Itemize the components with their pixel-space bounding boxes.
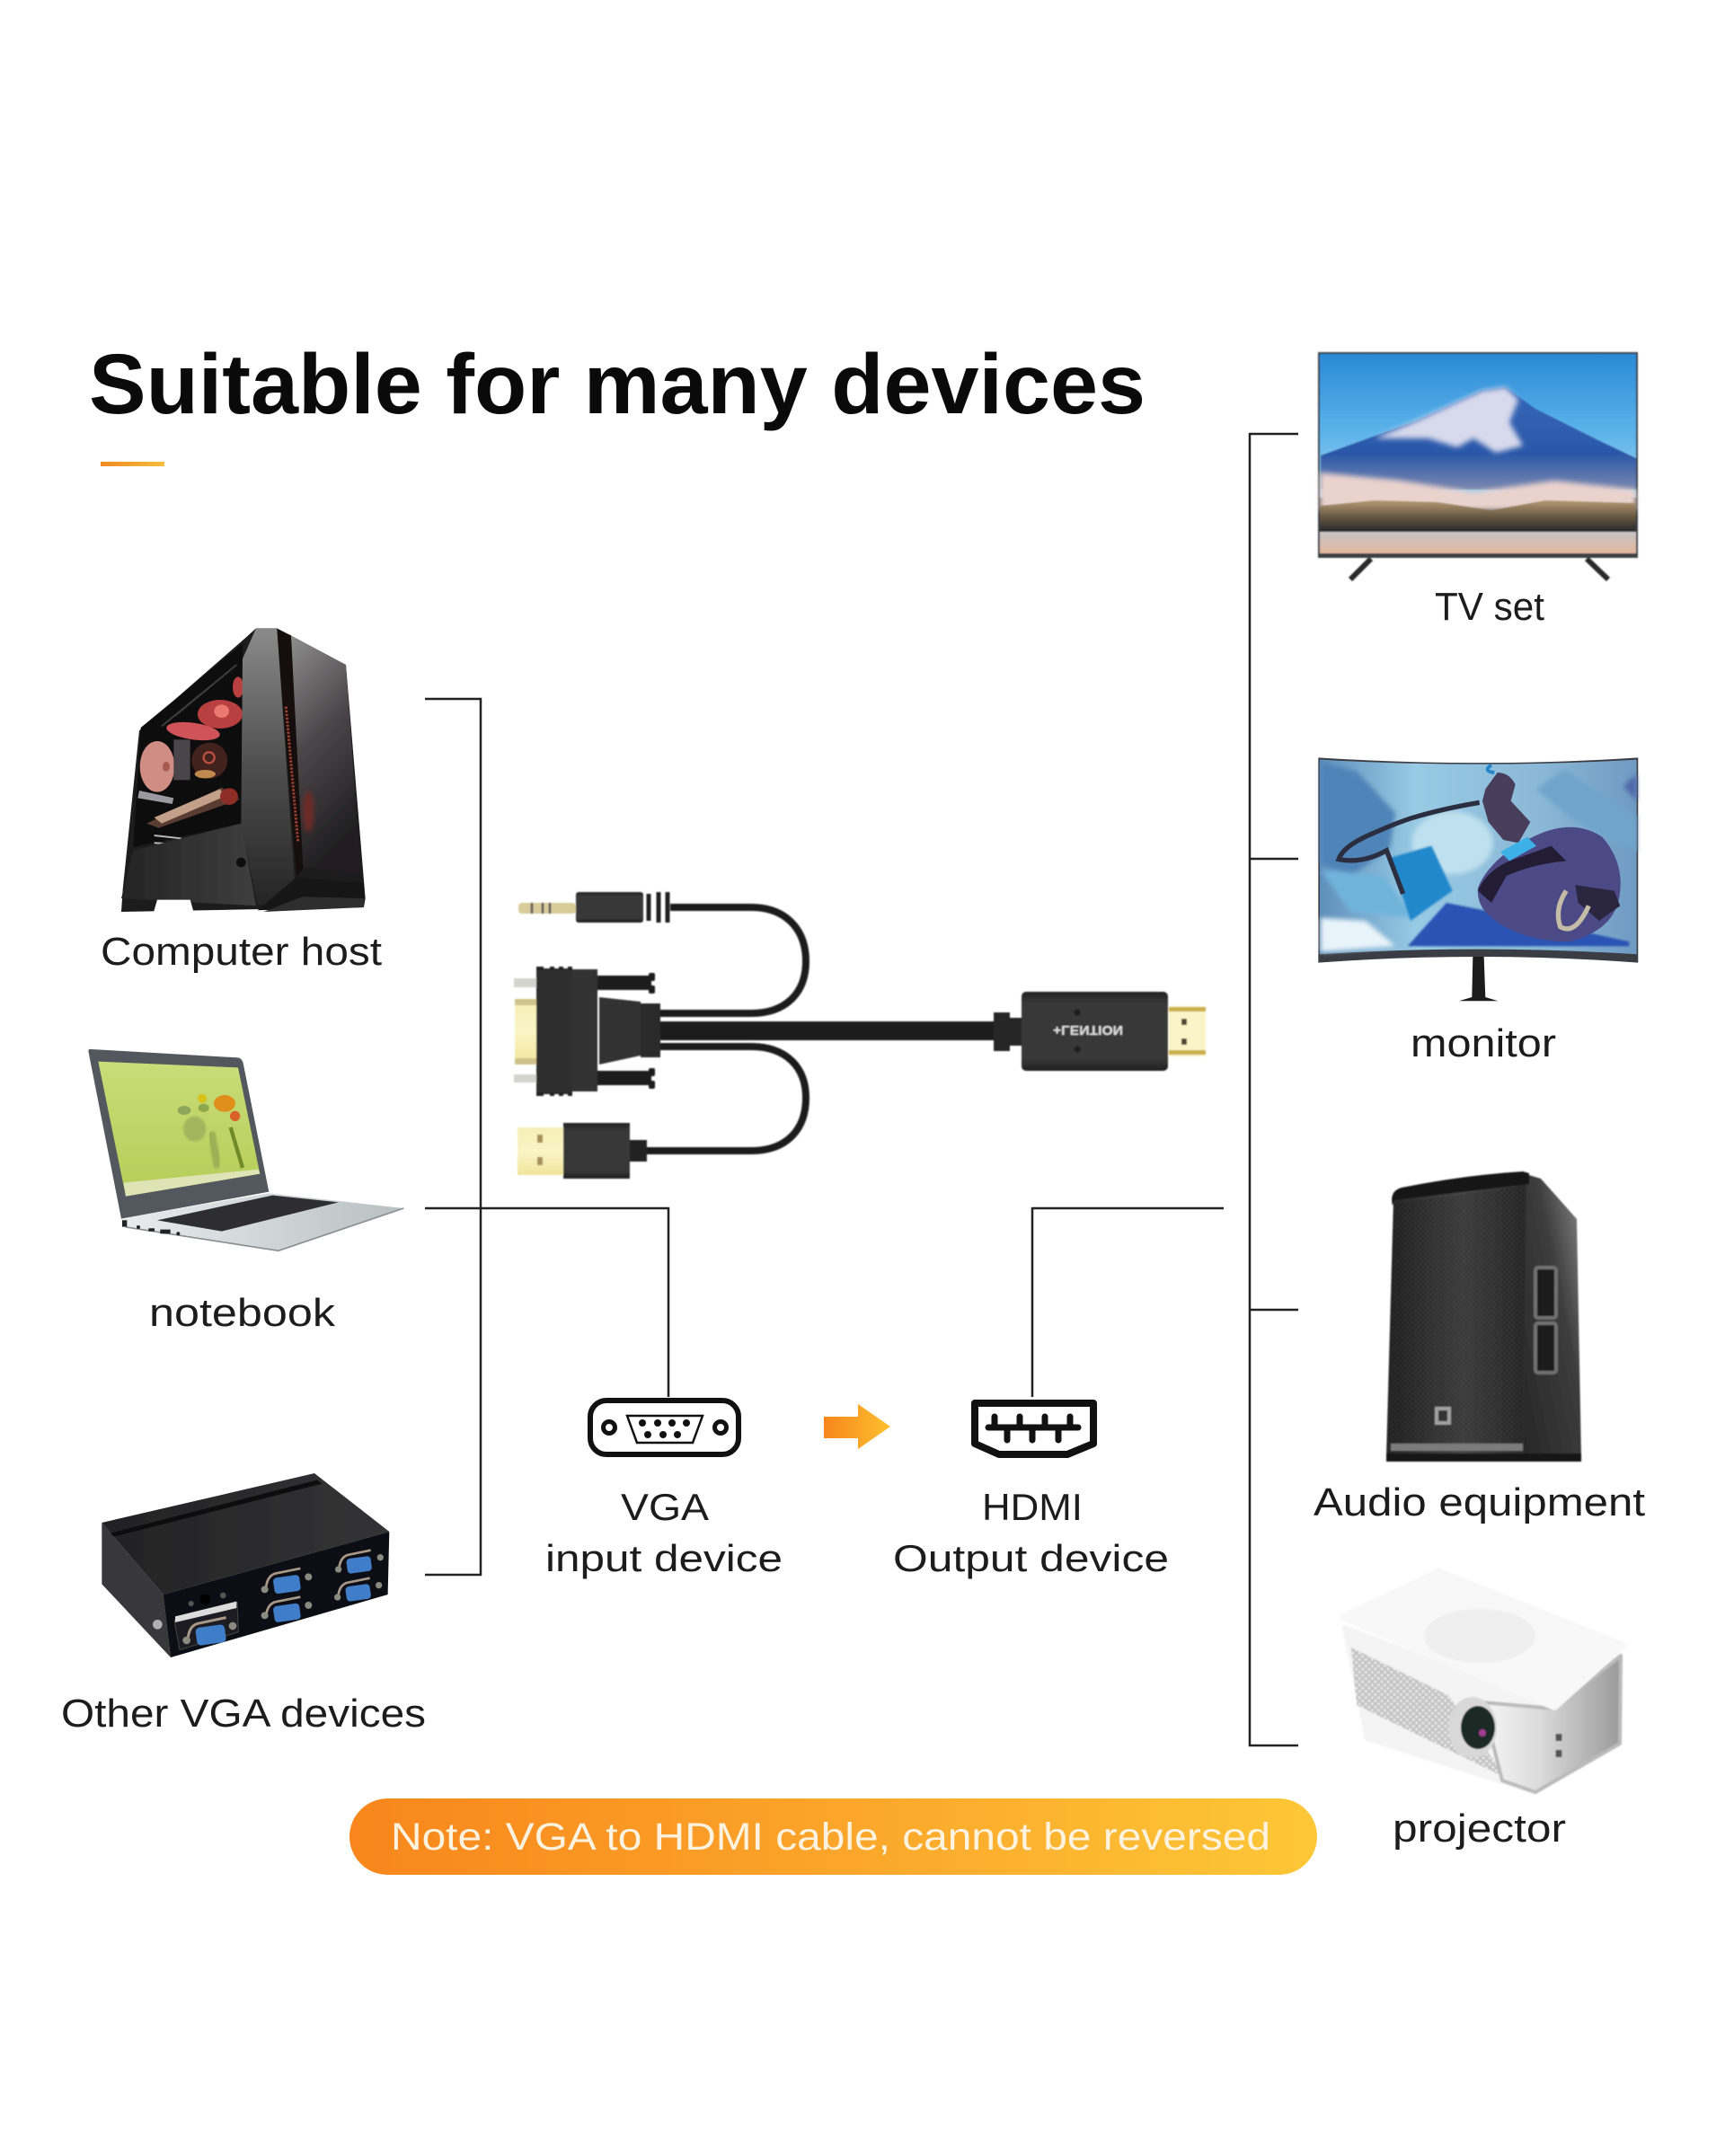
speaker front <box>1386 1182 1526 1457</box>
base lower edge <box>126 1208 403 1250</box>
device: notebook <box>88 1049 403 1250</box>
label: TV set: TV set <box>1435 585 1544 629</box>
artwork <box>1321 762 1637 952</box>
sky <box>1320 354 1636 498</box>
callout: note pill <box>349 1798 1317 1875</box>
laptop base <box>121 1193 403 1250</box>
projector side <box>1482 1656 1621 1792</box>
device: TV set <box>1318 352 1638 579</box>
base foot <box>1386 1454 1581 1462</box>
label: VGA input device <box>545 1486 783 1579</box>
label: HDMI output device: HDMI <box>982 1486 1083 1528</box>
top ridge <box>108 1480 322 1537</box>
box front <box>164 1532 389 1657</box>
USB plug <box>518 1123 647 1179</box>
cable product <box>514 892 1206 1179</box>
strain relief <box>994 1012 1022 1051</box>
side ports <box>122 1220 180 1235</box>
label: monitor: monitor <box>1411 1021 1556 1065</box>
red glow on front <box>303 791 314 833</box>
USB lead <box>647 1047 806 1151</box>
black slit with LED <box>277 629 303 878</box>
audio lead <box>660 907 806 1013</box>
flipped brand mark on plug: +LENTION <box>1053 1022 1123 1038</box>
HDMI plug gold tip <box>1169 1006 1206 1056</box>
saddle <box>1478 846 1566 903</box>
snow <box>1375 387 1523 453</box>
side vents <box>1556 1734 1561 1757</box>
hero plume <box>1488 765 1494 773</box>
TV frame <box>1318 352 1638 558</box>
tusk <box>1558 891 1588 929</box>
hero <box>1482 773 1530 843</box>
speaker grille mesh <box>1389 1186 1525 1442</box>
window rails <box>162 665 236 726</box>
laptop screen <box>98 1062 260 1197</box>
handle recess <box>1535 1268 1556 1373</box>
title: Suitable for many devices <box>89 337 1146 432</box>
flower on screen <box>178 1094 243 1168</box>
device: audio speaker <box>1386 1171 1581 1462</box>
internals <box>137 676 243 844</box>
label: Computer host: Computer host <box>101 930 382 974</box>
mountain <box>1321 387 1636 490</box>
icon: direction arrow <box>824 1404 890 1449</box>
TV legs <box>1350 559 1608 579</box>
main cable <box>660 1021 995 1040</box>
VGA port: upper right <box>335 1551 384 1574</box>
laptop lid <box>88 1049 269 1219</box>
connector: left bracket <box>425 699 481 1575</box>
clouds <box>1320 473 1636 510</box>
label: projector: projector <box>1393 1807 1566 1851</box>
speaker top edge <box>1392 1171 1529 1206</box>
note text: Note: VGA to HDMI cable, cannot be reversed <box>391 1816 1270 1859</box>
blue armor <box>1500 837 1536 861</box>
side window <box>133 644 243 847</box>
panel screw <box>236 858 246 867</box>
label: Audio equipment: Audio equipment <box>1314 1480 1645 1524</box>
side knob <box>153 1620 163 1630</box>
connector: right bracket <box>1250 434 1298 1745</box>
front panel <box>291 635 361 874</box>
whip <box>1339 802 1480 894</box>
speaker mesh <box>1351 1648 1506 1778</box>
front pillar <box>241 628 296 907</box>
label: notebook: notebook <box>149 1291 336 1335</box>
device: other VGA devices <box>102 1473 389 1657</box>
monitor screen <box>1320 760 1637 954</box>
logo badge <box>1435 1407 1451 1425</box>
beast body <box>1478 827 1621 941</box>
lens <box>1448 1697 1497 1758</box>
base cut-out <box>154 900 194 914</box>
connector: HDMI to right bracket <box>1032 1208 1224 1397</box>
screen light strip <box>124 1170 260 1197</box>
label: Other VGA devices: Other VGA devices <box>61 1692 426 1736</box>
VGA port: lower right <box>334 1578 382 1602</box>
LED dots <box>286 707 298 842</box>
projector front <box>1345 1628 1554 1792</box>
audio plug <box>518 892 668 923</box>
VGA port: lower left <box>261 1597 312 1622</box>
tree line <box>1320 500 1636 532</box>
label: HDMI output device <box>893 1486 1169 1579</box>
icon: VGA port <box>590 1401 739 1454</box>
status LEDs <box>189 1601 194 1606</box>
front base <box>258 878 364 910</box>
case silhouette <box>121 628 366 912</box>
base strip <box>1391 1444 1523 1451</box>
VGA port: upper left <box>261 1568 312 1595</box>
head shadow <box>1575 885 1620 921</box>
top dial <box>1424 1609 1535 1663</box>
main port frame <box>174 1603 238 1650</box>
status LED right <box>220 1593 226 1598</box>
monitor frame <box>1318 757 1638 963</box>
power jack <box>199 1595 210 1605</box>
base right bevel <box>263 897 364 912</box>
speaker side <box>1523 1173 1581 1461</box>
plug dimples <box>1075 1010 1080 1053</box>
box side <box>102 1523 171 1657</box>
icon: HDMI port <box>975 1403 1093 1454</box>
lake <box>1320 532 1636 553</box>
box top <box>102 1473 389 1595</box>
title underline <box>101 462 164 466</box>
connector: notebook to VGA <box>425 1208 668 1397</box>
label: HDMI output device: Output device <box>893 1537 1169 1579</box>
lower side panel <box>121 824 256 906</box>
VGA plug <box>514 967 660 1096</box>
label plate <box>175 1602 236 1622</box>
projector top <box>1343 1572 1623 1707</box>
monitor stand <box>1459 957 1498 1001</box>
VGA port: main <box>182 1618 236 1646</box>
label: VGA input device: VGA <box>621 1486 709 1528</box>
device: projector <box>1343 1572 1623 1792</box>
keyboard <box>157 1196 339 1232</box>
device: computer host <box>121 628 366 914</box>
device: monitor <box>1318 757 1638 1001</box>
label: VGA input device: input device <box>545 1537 783 1579</box>
HDMI plug body <box>1022 992 1168 1071</box>
